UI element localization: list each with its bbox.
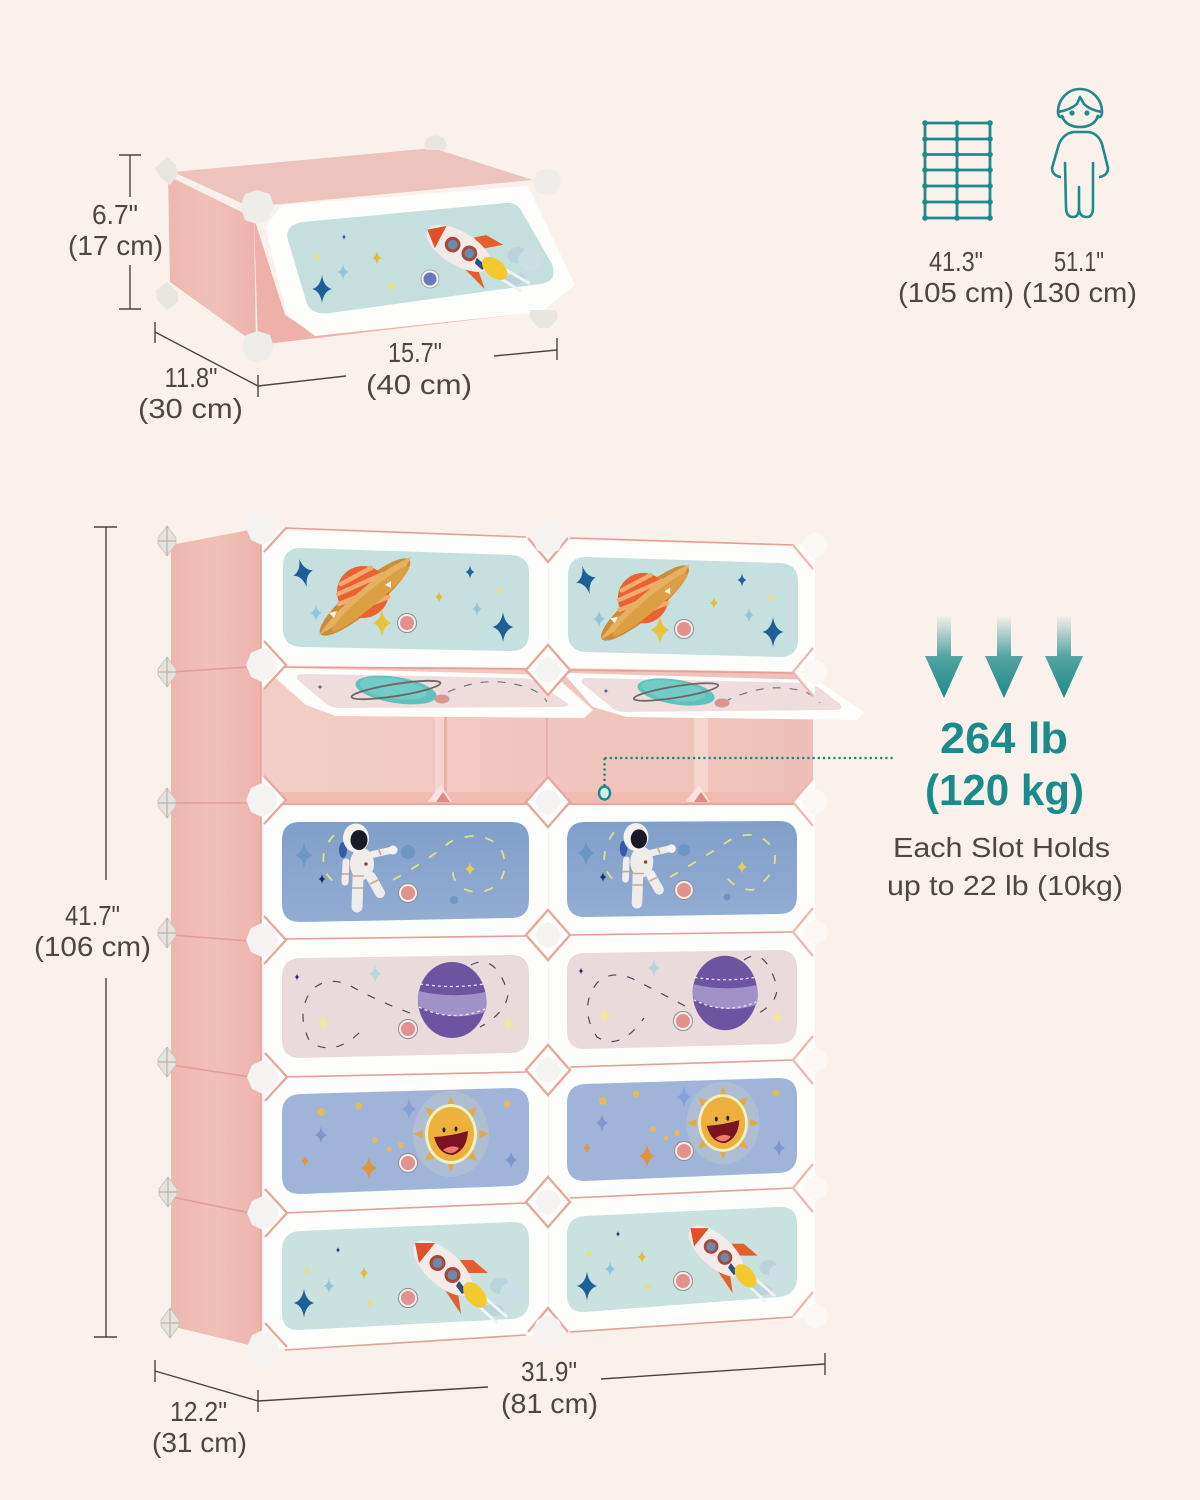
- height dimension 6.7: (17 cm): [68, 230, 163, 261]
- cube connectors: [155, 135, 561, 363]
- panel: [568, 557, 798, 657]
- load capacity: [925, 714, 1084, 815]
- label: child height: [1022, 246, 1137, 308]
- row 2 left flip door: [272, 668, 593, 718]
- connectors: [158, 511, 828, 1364]
- main width dimension 31.9: [258, 1353, 825, 1419]
- row 3 right door: [567, 821, 797, 917]
- rocket art: [680, 1217, 793, 1302]
- main width dimension 31.9: (81 cm): [501, 1388, 598, 1419]
- sun art: [413, 1091, 489, 1177]
- label: child height: (130 cm): [1022, 277, 1137, 308]
- load capacity: 264 lb: [940, 714, 1068, 763]
- teal planet: [633, 674, 719, 710]
- row 1 left door: [283, 548, 529, 651]
- row 3 left door: [282, 822, 529, 922]
- main height dimension 41.7: (106 cm): [34, 931, 151, 962]
- row 6 left door: [282, 1222, 529, 1330]
- label: shelf height: 41.3": [929, 246, 983, 277]
- main depth dimension 12.2: (31 cm): [152, 1427, 247, 1458]
- panel: [282, 1222, 529, 1330]
- purple planet art: [303, 962, 508, 1048]
- astronaut art: [323, 835, 505, 892]
- height dimension 6.7: 6.7": [92, 199, 138, 230]
- slot capacity note: [887, 832, 1123, 901]
- width dimension 15.7: [258, 337, 557, 400]
- row 1 right door: [568, 556, 798, 657]
- slot capacity note: up to 22 lb (10kg): [887, 870, 1123, 901]
- icon: load arrows: [925, 615, 1083, 698]
- sun art: [687, 1082, 759, 1164]
- load capacity: (120 kg): [925, 766, 1084, 815]
- door: [272, 668, 593, 718]
- astronaut art: [604, 832, 775, 890]
- cube front door: [265, 186, 575, 336]
- main height dimension 41.7: [34, 527, 151, 1337]
- label: shelf height: (105 cm): [898, 277, 1014, 308]
- teal planet: [351, 671, 441, 709]
- purple planet art: [588, 956, 777, 1042]
- small cube dimensions: [68, 155, 557, 424]
- callout leader: [599, 758, 895, 800]
- main depth dimension 12.2: 12.2": [170, 1396, 227, 1427]
- saturn: [312, 549, 418, 645]
- door seams: [263, 528, 813, 1350]
- panel: [283, 548, 529, 651]
- small cube product: [155, 135, 575, 363]
- height dimension 6.7: [68, 155, 163, 309]
- row 6 right door: [567, 1207, 797, 1312]
- main height dimension 41.7: 41.7": [65, 900, 120, 931]
- main depth dimension 12.2: [152, 1360, 258, 1458]
- cube top face: [173, 148, 533, 207]
- row 5 left door: [282, 1088, 529, 1194]
- cube art: [312, 197, 549, 309]
- cube left face: [168, 176, 256, 344]
- panel: [567, 1078, 797, 1181]
- cube inner side: [254, 218, 530, 345]
- doors: [262, 530, 815, 1350]
- panel: [567, 821, 797, 917]
- rocket art: [404, 1231, 526, 1323]
- panel: [282, 1088, 529, 1194]
- side panels: [171, 530, 261, 1350]
- door: [565, 673, 864, 720]
- label: child height: 51.1": [1054, 246, 1104, 277]
- main width dimension 31.9: 31.9": [521, 1356, 577, 1387]
- depth dimension 11.8: (30 cm): [138, 393, 243, 424]
- row 4 left door: [282, 955, 529, 1058]
- arrow 2: [985, 615, 1023, 698]
- arrow 3: [1045, 615, 1083, 698]
- main storage unit: [158, 511, 864, 1364]
- arrow 1: [925, 615, 963, 698]
- depth dimension 11.8: 11.8": [164, 362, 218, 393]
- slot capacity note: Each Slot Holds: [893, 832, 1110, 863]
- panel: [567, 1207, 797, 1312]
- width dimension 15.7: (40 cm): [366, 369, 472, 400]
- row 5 right door: [567, 1078, 797, 1181]
- panel: [567, 950, 797, 1049]
- icon: shelf grid: [922, 120, 993, 221]
- height comparison: [898, 89, 1137, 308]
- label: shelf height: [898, 246, 1014, 308]
- panel: [282, 955, 529, 1058]
- door panel: [287, 203, 554, 313]
- panel: [582, 678, 841, 712]
- saturn: [593, 556, 697, 650]
- panel: [297, 674, 568, 708]
- panel: [282, 822, 529, 922]
- icon: child: [1052, 89, 1108, 217]
- width dimension 15.7: 15.7": [388, 337, 442, 368]
- row 2 right flip door: [565, 673, 864, 720]
- open compartment interior: [262, 667, 813, 805]
- depth dimension 11.8: [138, 322, 258, 424]
- row 4 right door: [567, 950, 797, 1049]
